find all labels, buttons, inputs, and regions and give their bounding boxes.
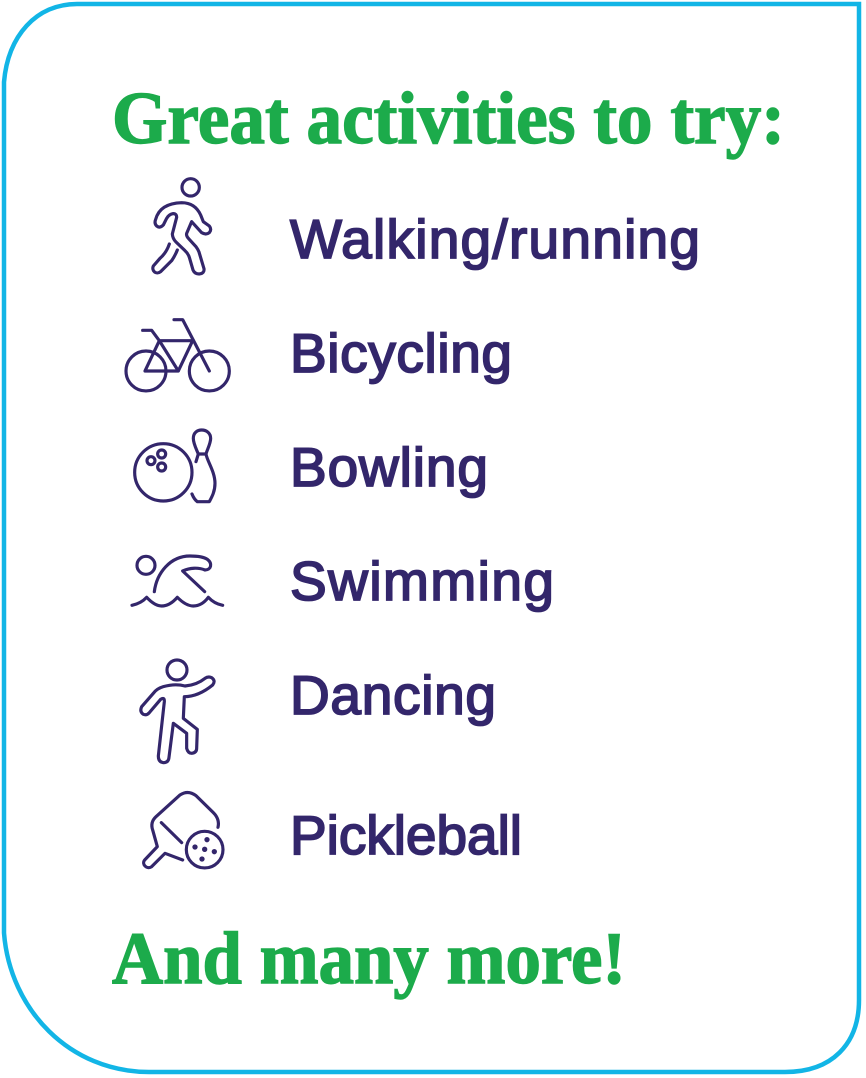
icon: pickleball paddle and ball	[144, 793, 223, 868]
label: bowling: Bowling	[290, 436, 488, 498]
closing line: And many more!	[112, 918, 626, 1000]
title: Great activities to try:	[112, 78, 785, 160]
icon: dancing person	[141, 660, 214, 763]
icon: bowling ball and pin	[135, 430, 215, 502]
label: bicycling: Bicycling	[290, 322, 512, 384]
label: pickleball: Pickleball	[290, 804, 522, 866]
icon: bicycle	[126, 320, 229, 391]
label: walking/running: Walking/running	[290, 208, 700, 270]
icon: swimmer	[132, 556, 223, 606]
label: dancing: Dancing	[290, 664, 496, 726]
label: swimming: Swimming	[290, 550, 554, 612]
icon: walking person	[153, 179, 211, 274]
